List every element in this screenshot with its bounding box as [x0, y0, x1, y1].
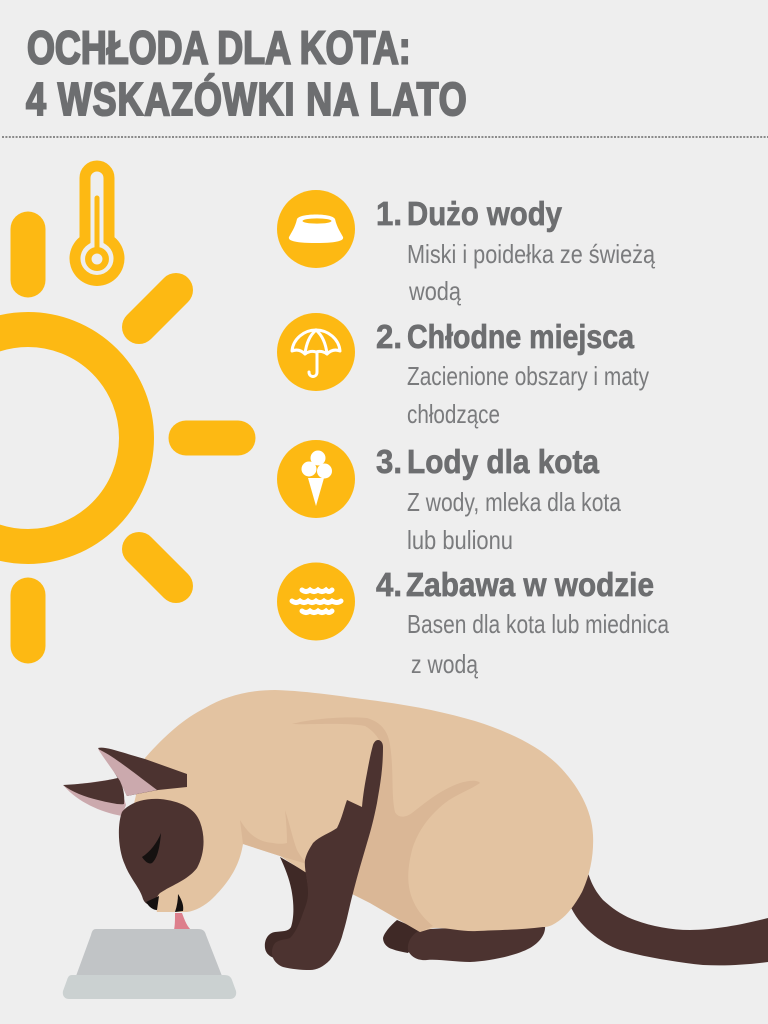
title: 4 WSKAZÓWKI NA LATO: [26, 74, 467, 125]
text: item 3: [376, 443, 621, 555]
far front leg: [265, 857, 309, 959]
nose and mouth: [146, 896, 159, 910]
text: item 4: z wodą: [411, 649, 478, 679]
text: item 1: Dużo wody: [407, 195, 563, 232]
text: item 2: Chłodne miejsca: [407, 318, 635, 355]
back paws: [383, 920, 425, 953]
icon: bowl: [277, 190, 355, 268]
icon: waves: [277, 562, 355, 640]
bowl: [63, 929, 236, 999]
text: item 2: [376, 318, 649, 429]
text: item 1: wodą: [408, 276, 461, 306]
text: item 2: chłodzące: [407, 399, 500, 429]
text: item 1: Miski i poidełka ze świeżą: [407, 239, 655, 269]
item 4: water play: [277, 562, 669, 679]
front leg with dark marking: [272, 740, 383, 970]
tail: [570, 873, 768, 965]
icon: sun: [0, 229, 238, 646]
icon: ice cream: [277, 440, 355, 518]
far ear: [64, 778, 126, 816]
text: item 3: lub bulionu: [407, 525, 513, 555]
body shading: [292, 717, 480, 932]
item 2: cool places: [277, 313, 649, 429]
text: item 4: [376, 566, 669, 679]
title: [26, 22, 467, 125]
icon: umbrella: [277, 313, 355, 391]
near ear: [98, 748, 187, 796]
text: item 4: 4.: [376, 566, 402, 603]
text: item 2: Zacienione obszary i maty: [407, 361, 649, 391]
item 1: water: [277, 190, 655, 306]
text: item 3: 3.: [376, 443, 402, 480]
closed eye: [142, 833, 161, 863]
tongue: [174, 913, 191, 930]
body: [130, 690, 593, 932]
text: item 4: Basen dla kota lub miednica: [407, 609, 669, 639]
title: OCHŁODA DLA KOTA:: [27, 22, 411, 74]
text: item 4: Zabawa w wodzie: [406, 566, 654, 603]
text: item 1: 1.: [376, 195, 402, 232]
text: item 3: Z wody, mleka dla kota: [407, 487, 621, 517]
text: item 2: 2.: [376, 318, 402, 355]
text: item 1: [376, 195, 655, 306]
item 3: ice cream: [277, 440, 621, 555]
text: item 3: Lody dla kota: [407, 443, 600, 480]
icon: thermometer: [75, 166, 119, 280]
head mask: [119, 799, 204, 905]
illustration: cat drinking from bowl: [63, 690, 768, 999]
